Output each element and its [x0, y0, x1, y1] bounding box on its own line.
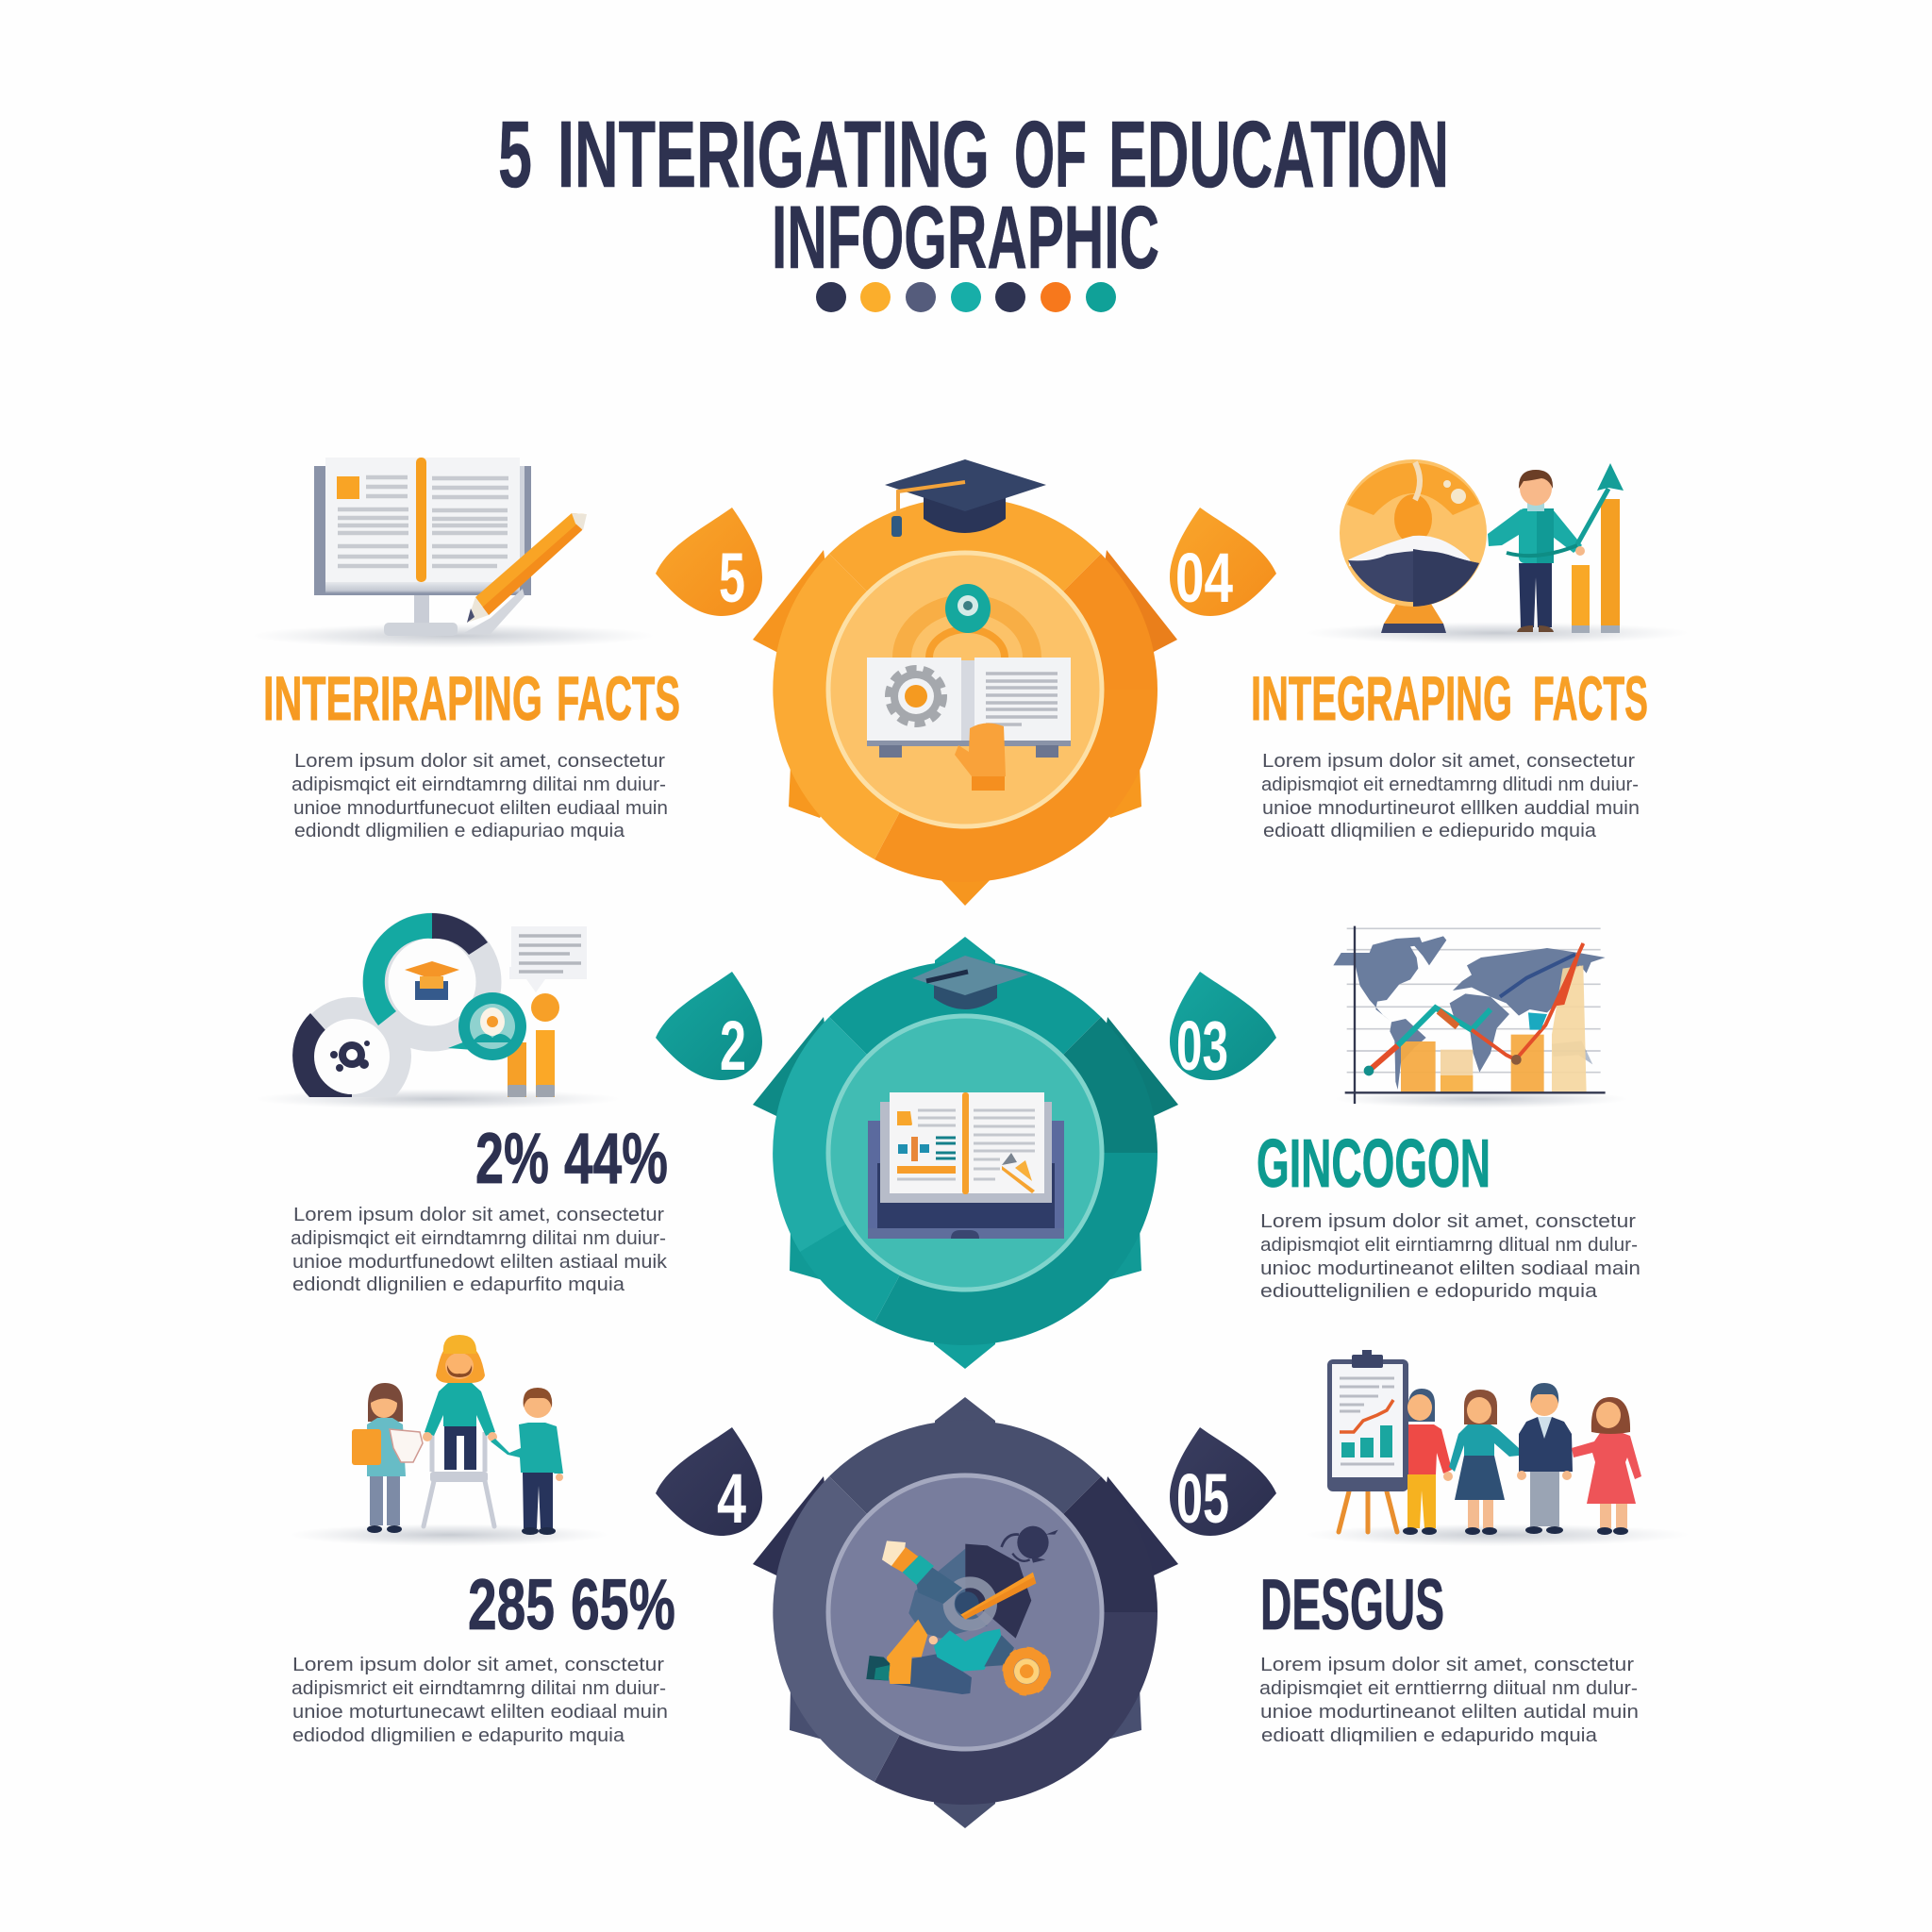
text block: right 2: adipismqiot elit eirntiamrng dlitual nm dulur-: [1260, 1234, 1638, 1256]
illustration: three people and chair: [289, 1335, 609, 1546]
decorative colour dots: [816, 282, 1116, 312]
title: OF: [1014, 102, 1087, 208]
text block: right 2: [1260, 1210, 1641, 1302]
heading: interiraping facts: FACTS: [557, 663, 680, 733]
badge: 05: [1170, 1427, 1276, 1538]
badge: 2: [656, 972, 762, 1085]
badge: 4: [656, 1427, 762, 1538]
stat: 2% 44%: 44%: [564, 1119, 668, 1199]
text block: left 2: [291, 1204, 668, 1295]
stat: 2% 44%: [475, 1119, 668, 1199]
text block: right 3: unioe modurtineanot elilten autidal muin: [1260, 1701, 1639, 1723]
text block: left 1: ediondt dligmilien e ediapuriao mquia: [294, 820, 625, 841]
icon: teal cap: [912, 956, 1028, 1009]
badge: 5: [656, 508, 762, 617]
badge: 5: 5: [719, 539, 745, 617]
icon: open book on tablet: [868, 1092, 1064, 1239]
text block: right 3: adipismqiet eit ernttierrng diitual nm dulur-: [1259, 1677, 1638, 1699]
text block: left 1: Lorem ipsum dolor sit amet, consectetur: [294, 750, 665, 772]
illustration: world map with chart: [1333, 926, 1629, 1108]
text block: left 3: ediodod dligmilien e edapurito mquia: [292, 1724, 625, 1746]
heading: gincogon: GINCOGON: [1257, 1126, 1491, 1202]
icon: book with gear: [867, 584, 1071, 791]
stat: 285 65%: 65%: [571, 1565, 675, 1645]
text block: left 2: unioe modurtfunedowt elilten astiaal muik: [292, 1251, 668, 1273]
illustration: globe, man and rising bars: [1304, 459, 1690, 644]
text block: left 2: Lorem ipsum dolor sit amet, consectetur: [293, 1204, 664, 1225]
text block: right 1: Lorem ipsum dolor sit amet, consectetur: [1262, 750, 1635, 772]
text block: left 1: [291, 750, 668, 841]
stat: 285 65%: [468, 1565, 675, 1645]
text block: left 3: unioe moturtunecawt elilten eodiaal muin: [292, 1701, 668, 1723]
text block: right 2: Lorem ipsum dolor sit amet, consctetur: [1260, 1210, 1636, 1232]
text block: left 1: unioe mnodurtfunecuot elilten eudiaal muin: [293, 797, 668, 819]
badge: 04: [1170, 508, 1276, 617]
text block: left 3: Lorem ipsum dolor sit amet, consctetur: [292, 1654, 664, 1675]
heading: desgus: DESGUS: [1260, 1565, 1444, 1645]
badge: 03: 03: [1176, 1007, 1228, 1085]
heading: integraping facts: FACTS: [1533, 663, 1648, 733]
title: INFOGRAPHIC: [772, 188, 1159, 288]
medallion: teal: [753, 937, 1178, 1369]
medallion: orange: [753, 497, 1177, 906]
text block: left 3: adipismrict eit eirndtamrng dilitai nm duiur-: [291, 1677, 666, 1699]
stat: 2% 44%: 2%: [475, 1119, 549, 1199]
text block: right 2: ediouttelignilien e edopurido mquia: [1260, 1280, 1598, 1302]
title: INTERIGATING: [558, 102, 990, 208]
badge: 4: 4: [717, 1459, 746, 1538]
text block: right 1: unioe mnodurtineurot elllken auddial muin: [1262, 797, 1640, 819]
text block: right 3: [1259, 1654, 1639, 1746]
illustration: donut charts and speech bubble: [254, 913, 622, 1109]
text block: right 3: edioatt dliqmilien e edapurido mquia: [1261, 1724, 1598, 1746]
icon: graduation cap orange: [885, 459, 1046, 537]
text block: left 2: ediondt dlignilien e edapurfito mquia: [292, 1274, 625, 1295]
badge: 04: 04: [1175, 539, 1233, 617]
text block: left 2: adipismqict eit eirndtamrng dilitai nm duiur-: [291, 1227, 666, 1249]
badge: 03: [1170, 972, 1276, 1085]
illustration: book on monitor with pencil: [250, 458, 656, 648]
text block: right 1: [1261, 750, 1640, 841]
icon: tools, pencil and gear: [866, 1526, 1058, 1694]
title: 5: [498, 102, 532, 208]
heading: integraping facts: INTEGRAPING: [1251, 663, 1512, 733]
text block: right 1: edioatt dliqmilien e ediepurido mquia: [1263, 820, 1597, 841]
stat: 285 65%: 285: [468, 1565, 555, 1645]
medallion: navy: [753, 1397, 1178, 1828]
text block: right 3: Lorem ipsum dolor sit amet, consctetur: [1260, 1654, 1634, 1675]
badge: 05: 05: [1176, 1459, 1229, 1538]
text block: right 2: unioc modurtineanot elilten sodiaal main: [1260, 1257, 1641, 1279]
badge: 2: 2: [720, 1007, 746, 1085]
text block: left 1: adipismqict eit eirndtamrng dilitai nm duiur-: [291, 774, 666, 795]
heading: interiraping facts: INTERIRAPING: [263, 663, 542, 733]
title: [498, 102, 1449, 288]
text block: left 3: [291, 1654, 668, 1746]
title: EDUCATION: [1108, 102, 1449, 208]
text block: right 1: adipismqiot eit ernedtamrng dlitudi nm duiur-: [1261, 774, 1639, 795]
illustration: team with chart board: [1304, 1350, 1690, 1546]
